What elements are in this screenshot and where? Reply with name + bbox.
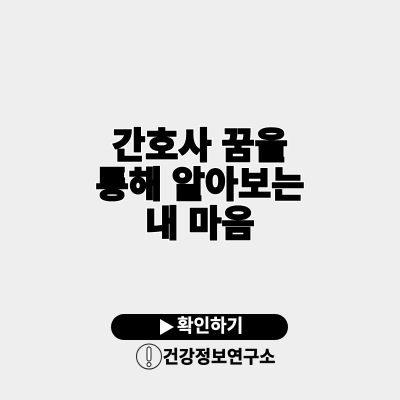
- brand name: 건강정보연구소: [163, 347, 275, 367]
- title: [95, 125, 305, 244]
- title: 통해 알아보는: [96, 164, 304, 205]
- title: 내 마음: [145, 203, 255, 244]
- title: 간호사 꿈을: [112, 125, 288, 166]
- button: 확인하기: [111, 314, 288, 340]
- title: 통해 알아보는: [96, 164, 304, 205]
- icon: exclamation in circle: [136, 344, 162, 370]
- title: 내 마음: [145, 203, 255, 244]
- title: 간호사 꿈을: [112, 125, 288, 166]
- button label: 확인하기: [177, 316, 243, 336]
- icon: play triangle: [160, 319, 174, 335]
